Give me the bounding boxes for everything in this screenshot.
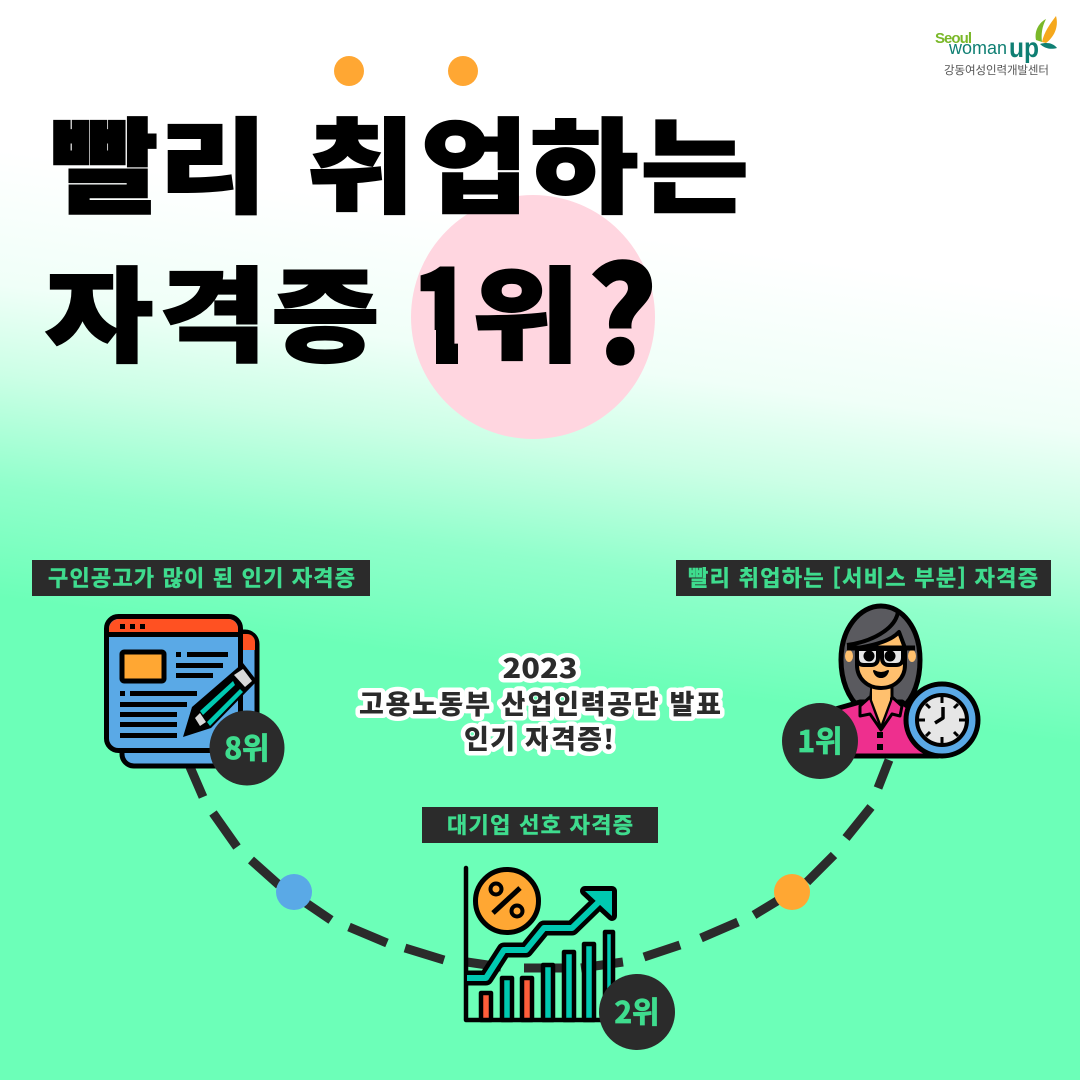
badge: 2위: 2위 (614, 988, 660, 1032)
centre text (359, 647, 721, 757)
title: 빨리 취업하는 (50, 85, 749, 234)
badge: 8위 (210, 710, 284, 786)
centre text: 고용노동부 산업인력공단 발표 (359, 683, 721, 722)
pink highlight circle (411, 195, 655, 439)
label: large company preference: 대기업 선호 자격증 (447, 808, 633, 840)
label: fast employment: 빨리 취업하는 [서비스 부분] 자격증 (688, 561, 1038, 593)
badge: 8위: 8위 (224, 724, 270, 768)
title: 자격증 (45, 234, 379, 383)
badge: 1위: 1위 (797, 717, 843, 761)
blue arc dot (276, 874, 312, 910)
logo: Seoul woman up: woman (948, 38, 1007, 58)
dashed arc connecting the icons (187, 760, 889, 968)
icon: web document with pencil (106, 616, 257, 766)
orange arc dot (774, 874, 810, 910)
centre text: 2023 (503, 647, 577, 686)
icon: growth chart with percent (466, 868, 613, 1020)
badge: 2위 (599, 974, 675, 1050)
logo: Seoul woman up: 강동여성인력개발센터 (944, 62, 1049, 78)
emphasis dots above title (334, 56, 478, 86)
logo: Seoul woman up (935, 16, 1057, 78)
logo: Seoul woman up: up (1009, 32, 1039, 63)
title (45, 85, 749, 401)
centre text: 인기 자격증! (464, 718, 614, 757)
title: 1 (411, 216, 474, 401)
badge: 1위 (782, 703, 858, 779)
icon: woman with clock (825, 606, 978, 756)
title: ? (587, 208, 657, 401)
logo: Seoul woman up: Seoul (935, 30, 972, 47)
title: 위 (472, 234, 580, 383)
label: job postings: 구인공고가 많이 된 인기 자격증 (48, 561, 355, 593)
